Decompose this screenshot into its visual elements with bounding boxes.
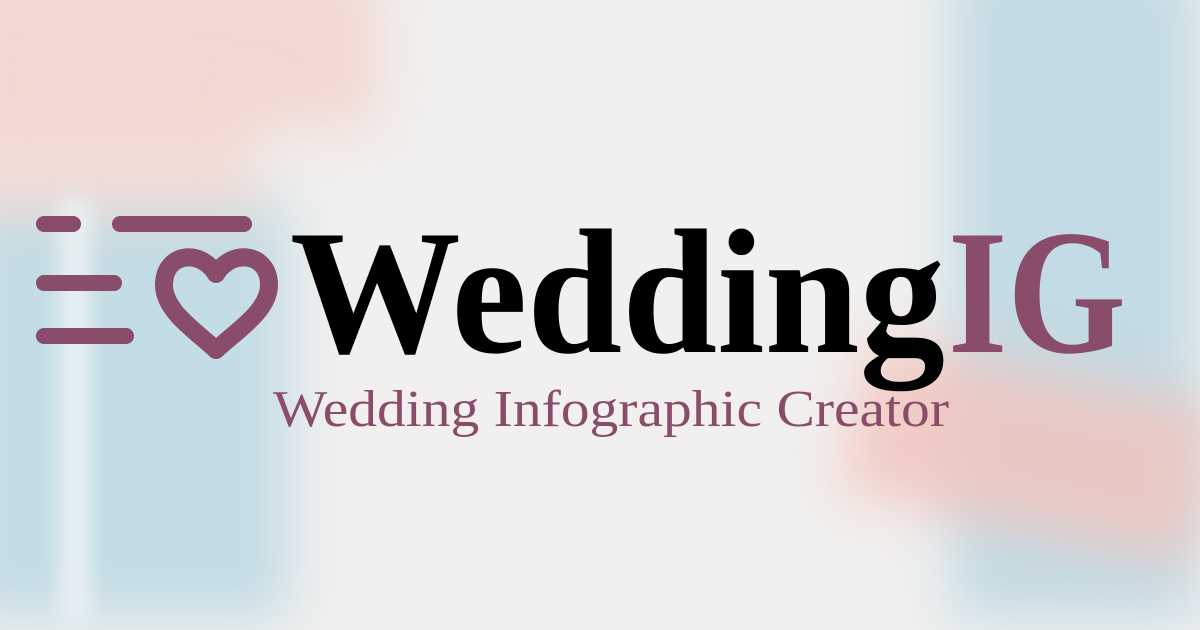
icon: list lines with heart [44,224,269,350]
title: IG [948,193,1126,391]
title: Wedding [290,193,945,391]
subtitle: Wedding Infographic Creator [273,381,949,438]
